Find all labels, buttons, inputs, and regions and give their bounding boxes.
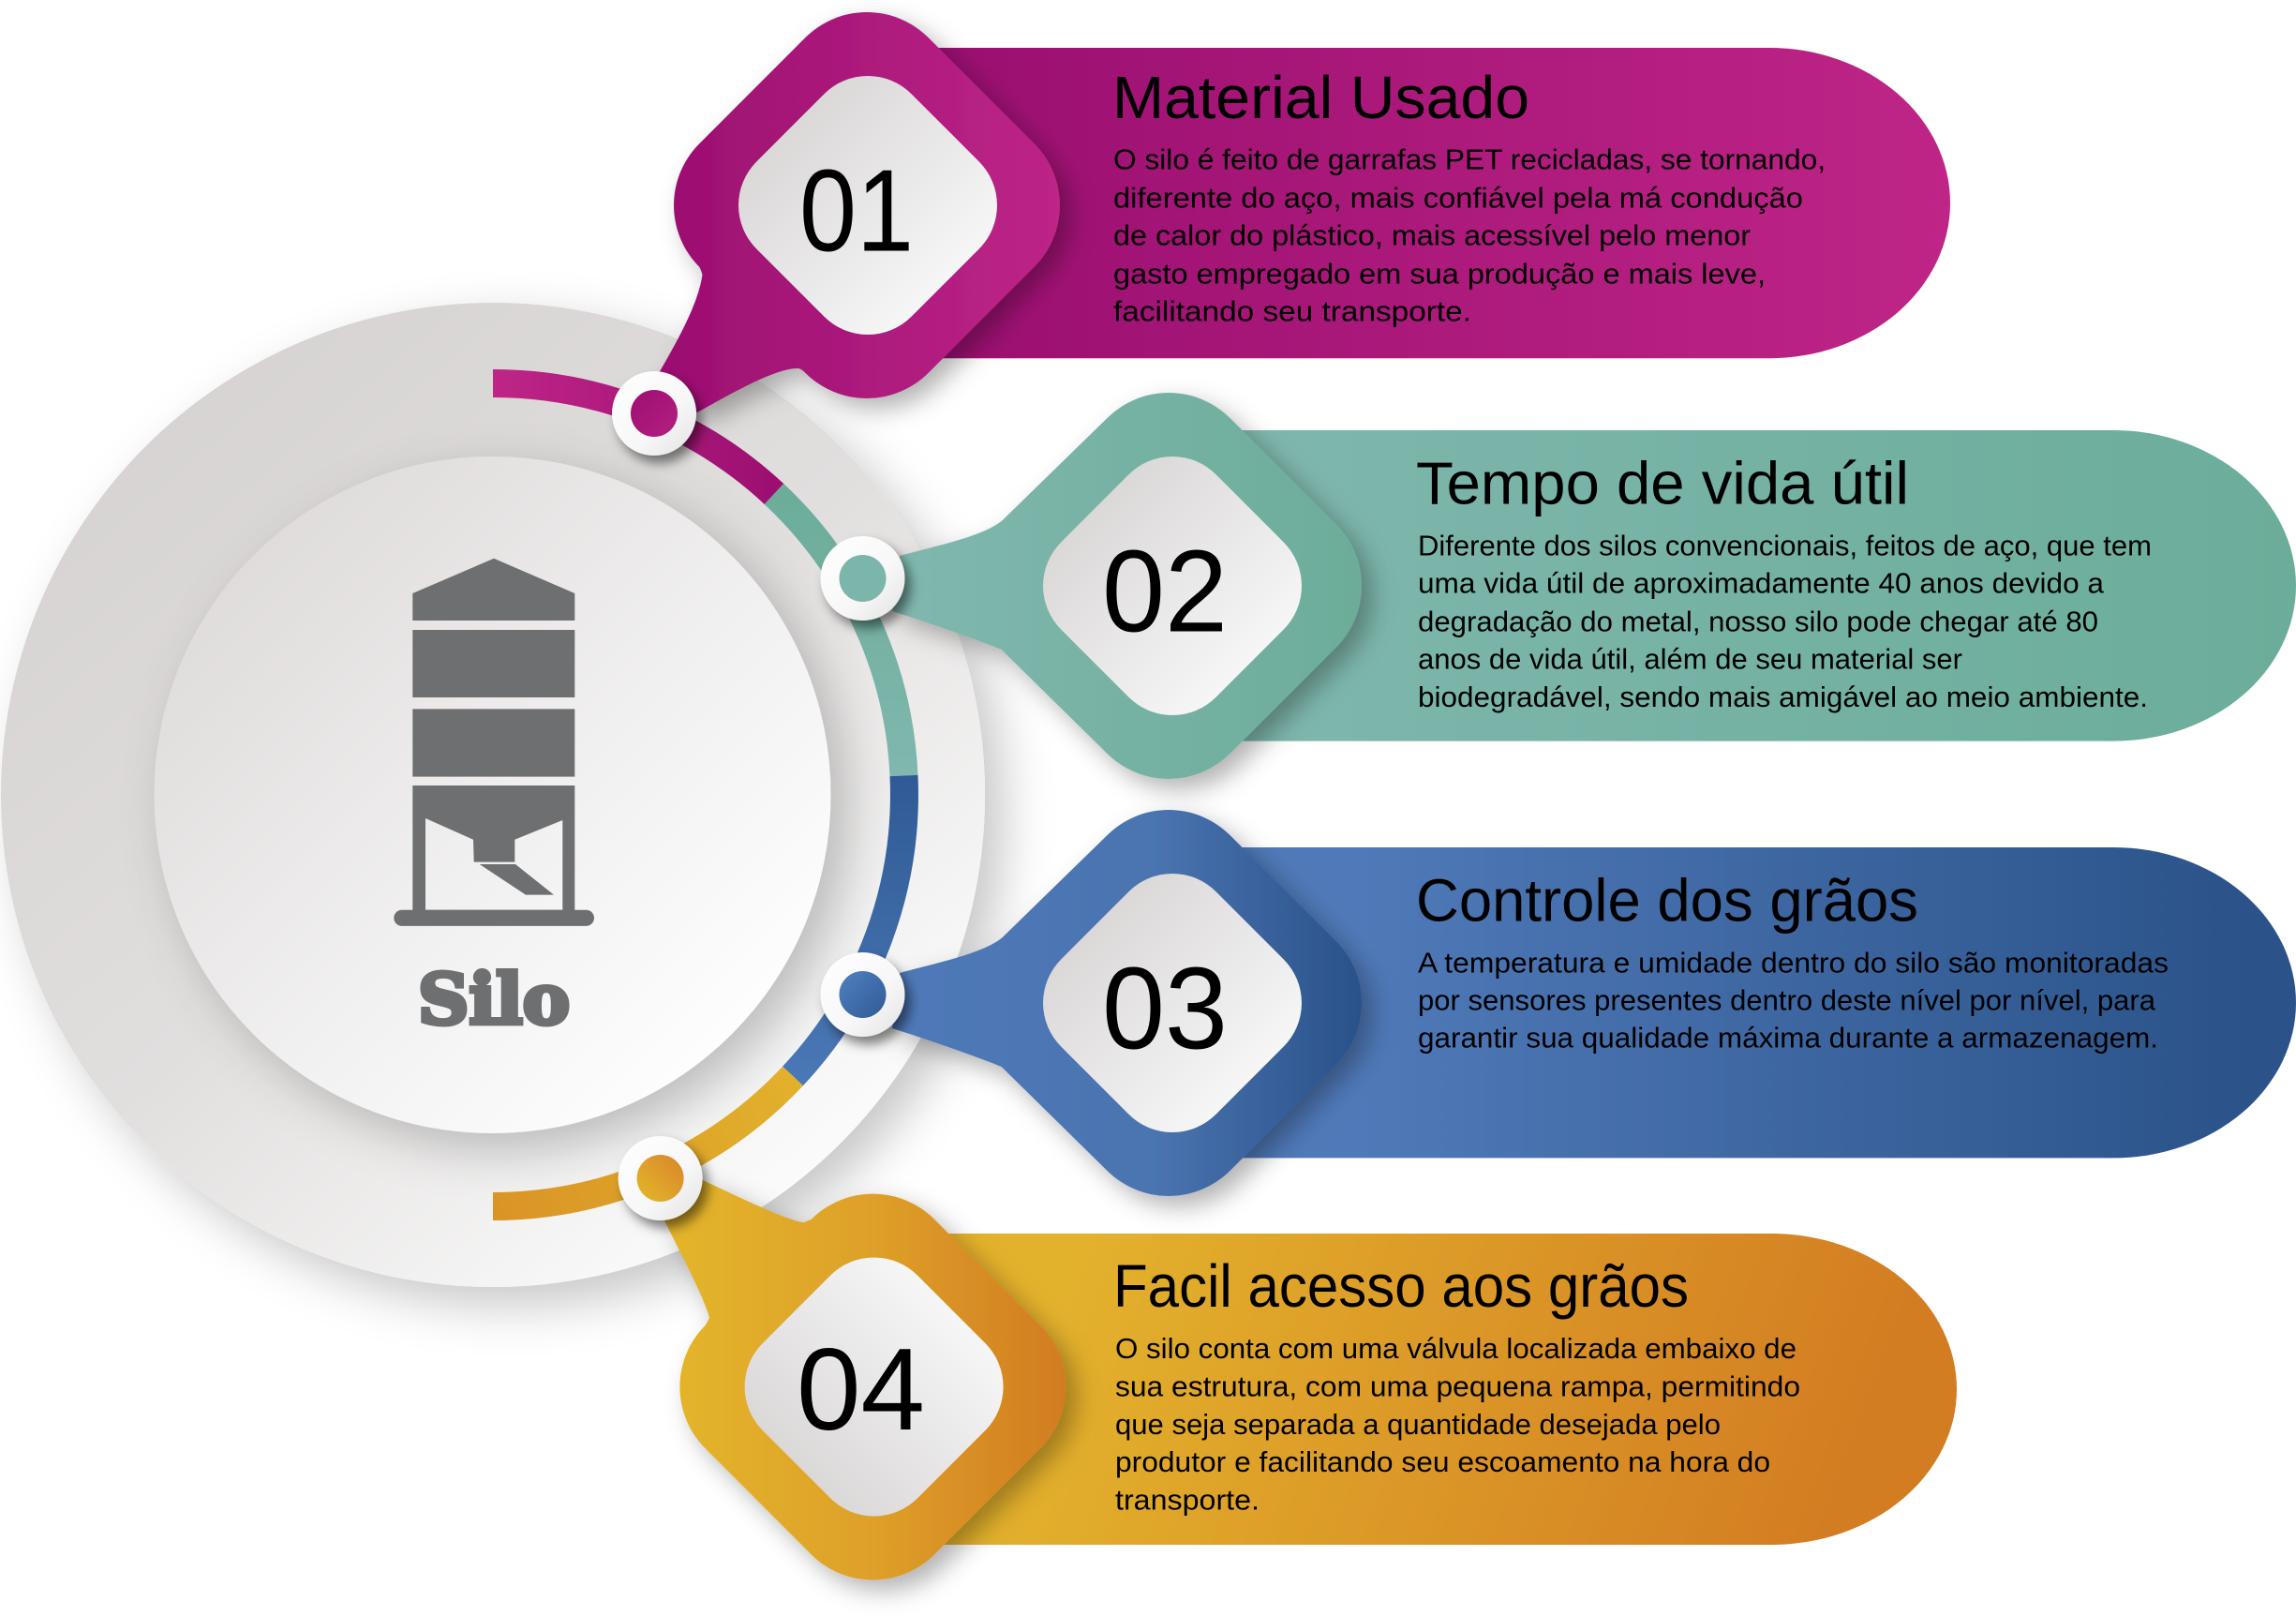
heading: Tempo de vida útil [1416, 449, 1909, 516]
body text [1113, 143, 1826, 327]
number: 01 [799, 147, 914, 277]
node [612, 371, 696, 456]
number: 02 [1102, 527, 1228, 656]
icon: silo [394, 559, 594, 926]
body text: O silo é feito de garrafas PET recicladas, se tornando, [1113, 143, 1826, 176]
outer disk [1, 303, 985, 1287]
banner [1171, 847, 2296, 1158]
body text: Diferente dos silos convencionais, feitos de aço, que tem [1418, 529, 2152, 561]
heading: Controle dos grãos [1416, 866, 1918, 934]
body text: que seja separada a quantidade desejada pelo [1115, 1408, 1721, 1441]
body text: O silo conta com uma válvula localizada embaixo de [1115, 1332, 1797, 1365]
banner [867, 48, 1950, 358]
node [619, 1136, 703, 1220]
panel: Controle dos grãos [821, 810, 2296, 1196]
body text [1418, 946, 2169, 1055]
ring segment: teal [774, 494, 903, 776]
number: 03 [1102, 944, 1228, 1073]
body text: gasto empregado em sua produção e mais leve, [1113, 257, 1766, 290]
heading: Facil acesso aos grãos [1113, 1252, 1689, 1320]
node [821, 536, 905, 621]
banner [873, 1234, 1957, 1545]
body text: diferente do aço, mais confiável pela má condução [1113, 182, 1803, 215]
body text: transporte. [1115, 1484, 1260, 1517]
body text: por sensores presentes dentro deste nível por nível, para [1418, 984, 2156, 1017]
panel: Tempo de vida útil [821, 393, 2296, 779]
banner [1171, 430, 2296, 741]
number: 04 [797, 1325, 925, 1455]
number plate [713, 51, 1022, 360]
body text [1115, 1332, 1800, 1517]
number plate [1018, 431, 1327, 741]
badge with tail [892, 810, 1362, 1196]
body text: produtor e facilitando seu escoamento na hora do [1115, 1445, 1770, 1478]
ring segment: blue [793, 776, 904, 1076]
number plate [719, 1232, 1029, 1542]
number plate [1018, 848, 1327, 1158]
segmented ring [493, 383, 904, 1206]
panel: Material Usado [612, 12, 1950, 456]
body text: facilitando seu transporte. [1113, 294, 1471, 327]
body text [1418, 529, 2152, 713]
node [821, 952, 905, 1037]
ring segment: magenta [493, 383, 774, 494]
body text: sua estrutura, com uma pequena rampa, permitindo [1115, 1369, 1800, 1402]
body text: A temperatura e umidade dentro do silo são monitoradas [1418, 946, 2169, 979]
label: Silo: Silo [418, 960, 570, 1040]
body text: anos de vida útil, além de seu material ser [1418, 642, 1962, 675]
body text: de calor do plástico, mais acessível pelo menor [1113, 219, 1751, 252]
body text: biodegradável, sendo mais amigável ao meio ambiente. [1418, 681, 2148, 713]
badge with tail [660, 12, 1060, 412]
ring segment: gold [493, 1076, 793, 1206]
body text: degradação do metal, nosso silo pode chegar até 80 [1418, 605, 2098, 637]
body text: uma vida útil de aproximadamente 40 anos devido a [1418, 567, 2105, 600]
badge with tail [664, 1180, 1066, 1580]
inner disk [154, 456, 830, 1133]
heading: Material Usado [1112, 64, 1529, 131]
panel: Facil acesso aos grãos [619, 1136, 1957, 1580]
badge with tail [892, 393, 1362, 779]
body text: garantir sua qualidade máxima durante a armazenagem. [1418, 1022, 2158, 1055]
